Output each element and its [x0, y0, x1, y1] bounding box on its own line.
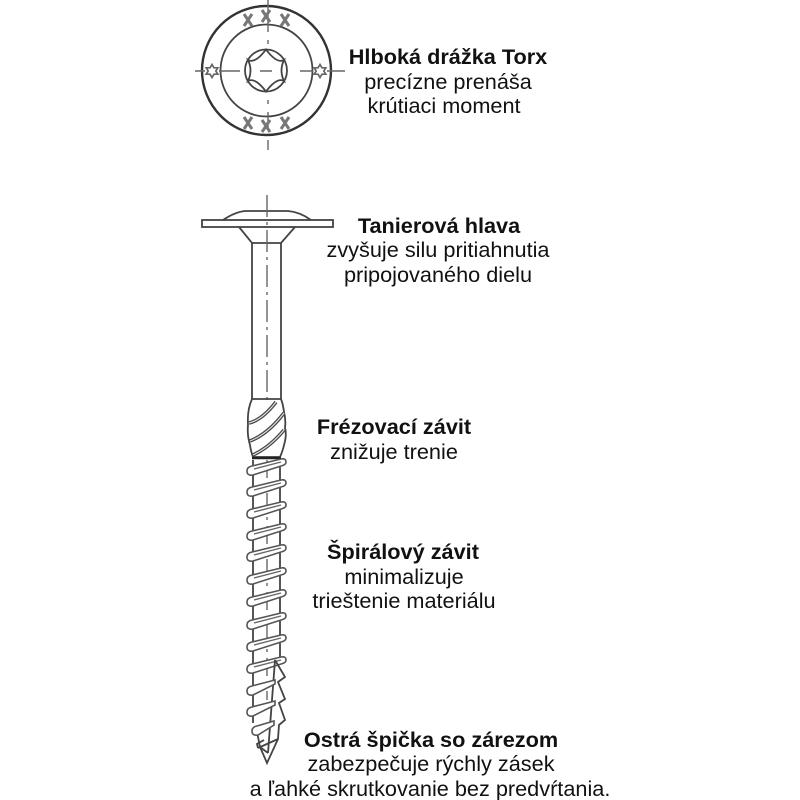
label: plate head: Tanierová hlava [358, 213, 521, 238]
label: spiral thread: trieštenie materiálu [312, 588, 496, 613]
label: plate head: zvyšuje silu pritiahnutia [326, 237, 550, 262]
label: spiral thread [312, 539, 496, 613]
label: plate head [326, 213, 550, 287]
label: plate head: pripojovaného dielu [344, 262, 532, 287]
label: Torx: Hlboká drážka Torx [349, 44, 547, 69]
label: sharp tip [250, 727, 610, 800]
sharp notched tip [247, 660, 285, 763]
milling thread [248, 399, 286, 458]
label: spiral thread: minimalizuje [344, 564, 464, 589]
label: spiral thread: Špirálový závit [327, 539, 479, 564]
label: Torx: precízne prenáša [364, 69, 533, 94]
label: milling thread: Frézovací závit [317, 414, 471, 439]
top view of screw head with Torx recess [195, 0, 345, 150]
label: milling thread: znižuje trenie [330, 439, 458, 464]
label: Torx [349, 44, 547, 118]
label: sharp tip: Ostrá špička so zárezom [304, 727, 558, 752]
label: Torx: krútiaci moment [367, 93, 521, 118]
label: sharp tip: zabezpečuje rýchly zásek [307, 751, 555, 776]
screw shank [252, 195, 281, 400]
spiral thread [247, 459, 286, 723]
side view of plate head [202, 211, 333, 243]
label: milling thread [317, 414, 471, 464]
